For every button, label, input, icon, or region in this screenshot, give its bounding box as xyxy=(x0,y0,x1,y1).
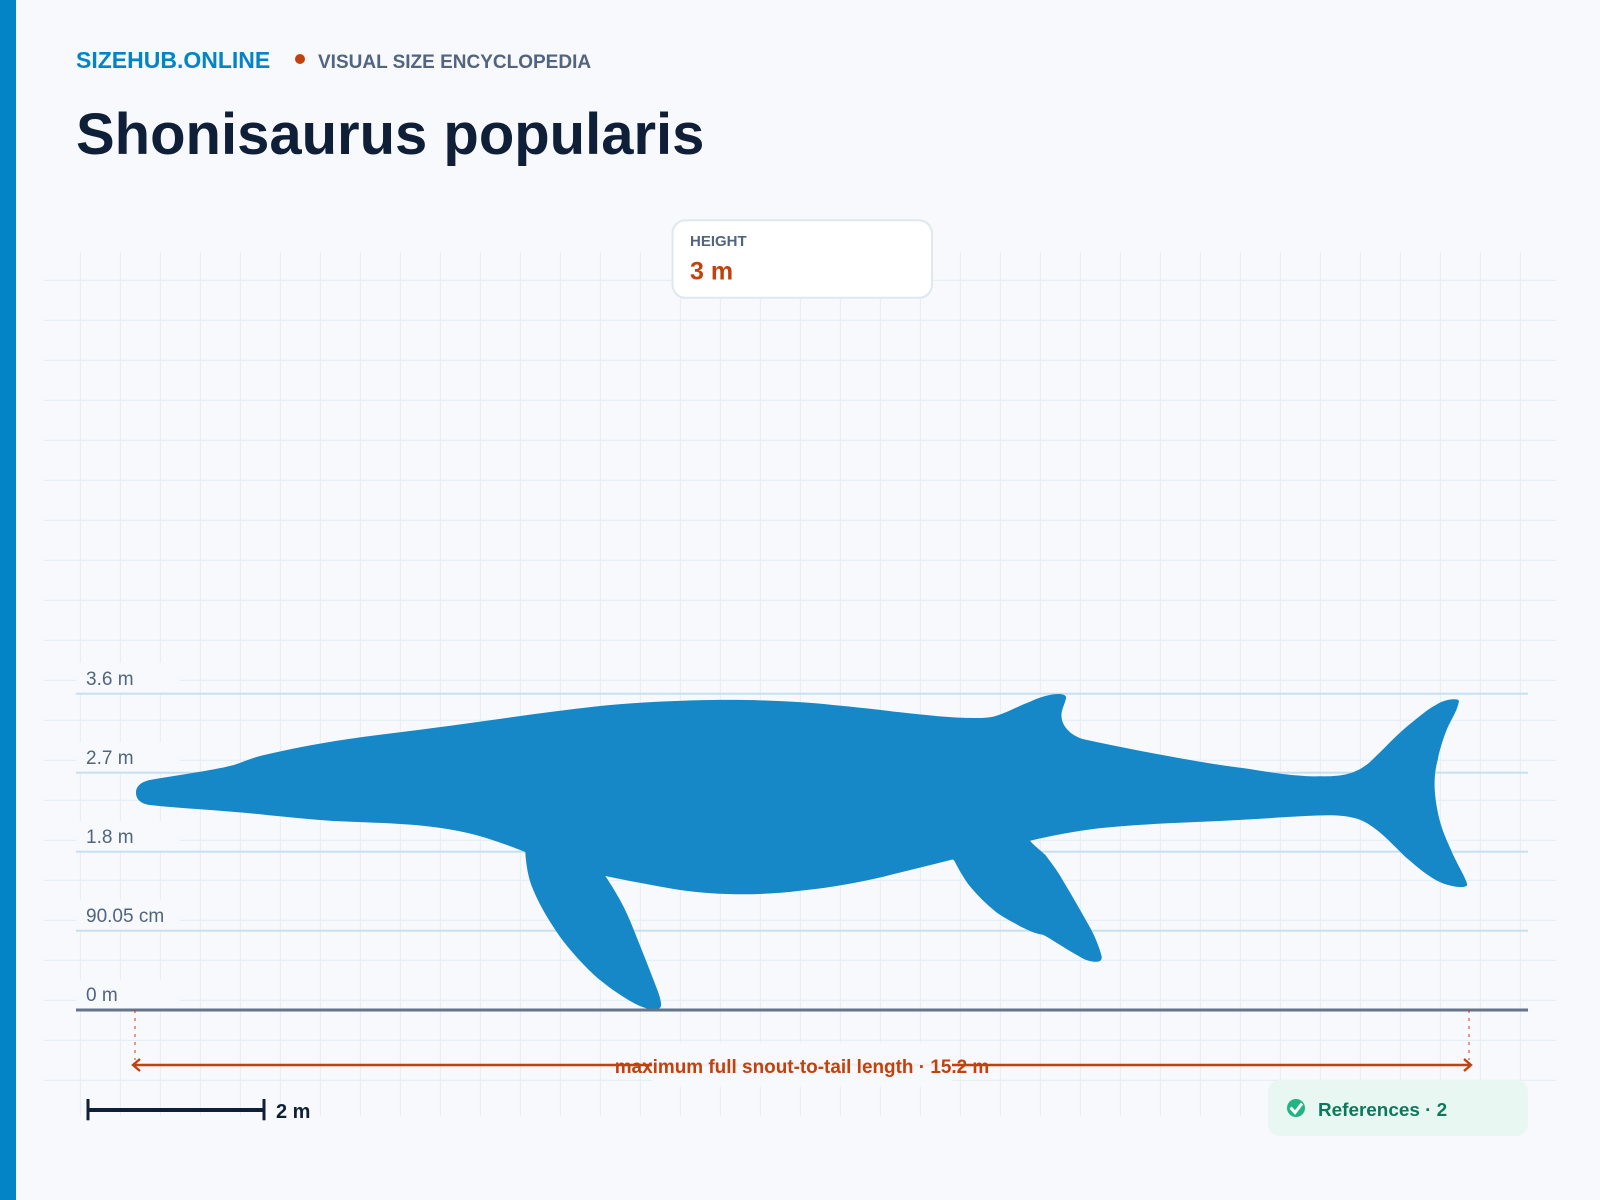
height label: HEIGHT xyxy=(690,233,747,250)
tick label 90.05 cm: 90.05 cm xyxy=(86,906,164,927)
references badge xyxy=(1268,1080,1528,1136)
tick label 3.6 m: 3.6 m xyxy=(86,669,134,690)
tick label 0 m: 0 m xyxy=(86,985,118,1006)
length arrow xyxy=(133,1059,1471,1071)
scale bar xyxy=(86,1099,310,1123)
brand dot xyxy=(295,54,305,64)
tagline: VISUAL SIZE ENCYCLOPEDIA xyxy=(318,52,591,73)
Shonisaurus silhouette xyxy=(136,694,1467,1009)
icon: check xyxy=(1287,1099,1305,1117)
height ruler xyxy=(76,663,1528,1009)
right dotted guide xyxy=(1468,1010,1470,1060)
length label: maximum full snout-to-tail length · 15.2 m xyxy=(615,1057,989,1078)
tick label 2.7 m: 2.7 m xyxy=(86,748,134,769)
header brand row xyxy=(76,47,591,73)
height stat card xyxy=(672,220,932,298)
scale label: 2 m xyxy=(276,1101,310,1123)
length measurement xyxy=(133,1010,1471,1087)
height value: 3 m xyxy=(690,257,733,285)
title: Shonisaurus popularis xyxy=(76,102,704,167)
references text: References · 2 xyxy=(1318,1100,1447,1121)
tick label 1.8 m: 1.8 m xyxy=(86,827,134,848)
left dotted guide xyxy=(134,1010,136,1060)
baseline xyxy=(76,1008,1528,1012)
sidebar accent xyxy=(0,0,16,1200)
brand name: SIZEHUB.ONLINE xyxy=(76,47,270,73)
